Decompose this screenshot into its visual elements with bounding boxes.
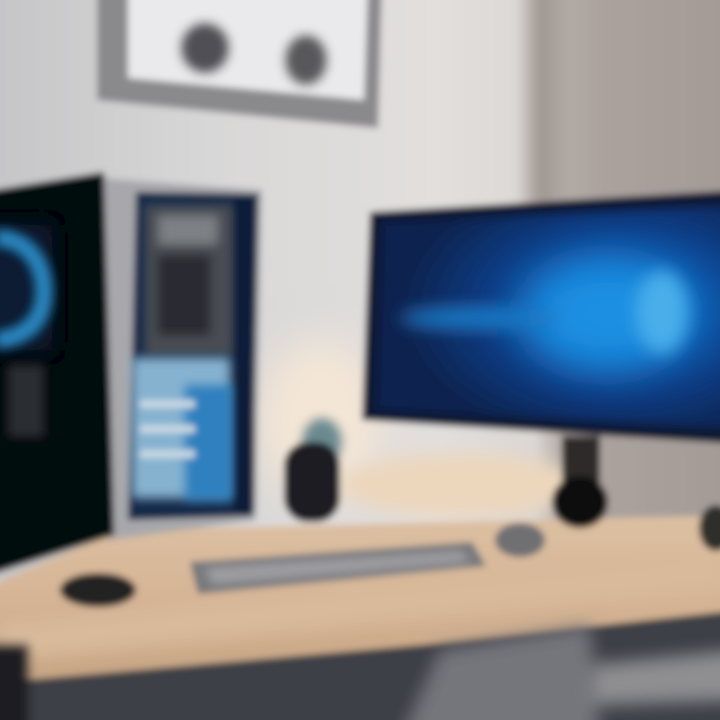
small desk object	[495, 523, 545, 557]
monitor bezel	[362, 190, 720, 444]
chair	[400, 625, 600, 720]
monitor screen	[376, 204, 720, 430]
mouse	[60, 573, 136, 607]
keyboard	[190, 542, 486, 594]
tower front blue ring	[0, 225, 52, 437]
PC tower	[0, 172, 262, 578]
speaker	[284, 418, 342, 522]
picture dark shapes	[181, 23, 229, 73]
tower interior	[132, 198, 254, 513]
monitor	[362, 190, 720, 528]
wall picture frame	[97, 0, 382, 128]
tower front	[0, 172, 114, 578]
monitor stand	[552, 436, 608, 528]
screen glow	[400, 263, 688, 367]
desk surface	[0, 515, 720, 690]
area under desk	[0, 610, 720, 720]
right desk object	[699, 505, 720, 551]
tower side panel	[100, 178, 262, 540]
